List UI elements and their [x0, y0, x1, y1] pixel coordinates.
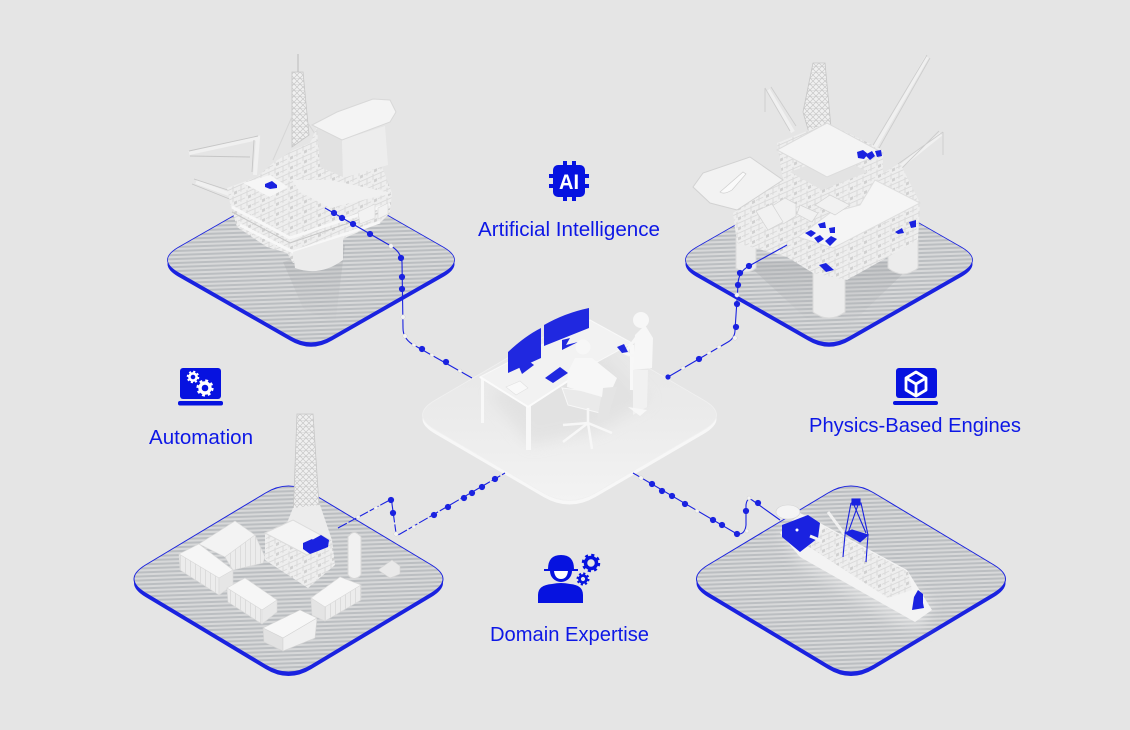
upper deck [777, 123, 883, 177]
floor shadow [490, 350, 650, 445]
icons: blue equipment [805, 150, 916, 272]
panel: top-left offshore platform [168, 54, 454, 347]
drill floor [265, 520, 330, 555]
panel: bottom-left drilling site [134, 414, 443, 676]
plate: top-right base [686, 177, 972, 347]
seated person and chair [562, 340, 617, 449]
upper block [317, 128, 343, 177]
deck surfaces [232, 175, 392, 252]
cranes [765, 55, 943, 168]
monitors [508, 308, 589, 374]
icon: blue equipment [265, 181, 277, 189]
books [506, 381, 528, 395]
icon: automation laptop with gears [178, 368, 223, 406]
icon: physics laptop with cube [893, 368, 938, 405]
helideck [693, 157, 783, 210]
connector: top-right platform to centre [665, 245, 787, 380]
tablet [617, 344, 628, 353]
platform silhouette [733, 123, 920, 280]
building: right block [311, 577, 361, 621]
building: large warehouse [179, 521, 265, 595]
heading: Automation: Automation [149, 427, 253, 449]
desk [480, 320, 634, 450]
tank [348, 532, 361, 578]
small unit [378, 560, 400, 578]
ship glow [780, 513, 930, 630]
platform slab [422, 330, 716, 504]
cargo boxes [756, 195, 850, 230]
icon: domain expert with gears [538, 555, 599, 603]
helideck [312, 99, 396, 140]
building: centre block [227, 578, 277, 624]
keyboard [545, 367, 568, 383]
plate: bottom-right base [696, 486, 1006, 676]
crane booms [189, 136, 258, 200]
blue module: stern [912, 590, 924, 610]
icon: AI chip [549, 161, 589, 201]
icon: AI chip: AI [559, 171, 579, 194]
derrick [273, 54, 322, 160]
panel: top-right offshore platform [686, 55, 972, 347]
plate: top-left base [168, 177, 454, 347]
plate: bottom-left base [134, 486, 443, 676]
heading: Physics-Based Engines: Physics-Based Engines [809, 415, 1021, 437]
blue module: bow [782, 515, 822, 552]
connector: bottom-left site to centre [338, 473, 505, 536]
heading: Artificial Intelligence: Artificial Intelligence [478, 219, 660, 241]
spar hull [293, 236, 343, 271]
crane arm [828, 512, 845, 535]
containers [263, 610, 317, 651]
derrick [293, 414, 320, 520]
platform body [227, 127, 392, 263]
panel: bottom-right drilling vessel [696, 486, 1006, 676]
blue derrick [843, 499, 868, 562]
main deck [798, 180, 920, 248]
icon: blue equipment [303, 535, 329, 554]
derrick [803, 63, 832, 150]
ship hull [780, 513, 932, 622]
heading: Domain Expertise: Domain Expertise [490, 624, 649, 646]
satellite dish [776, 505, 800, 519]
legs [736, 238, 918, 318]
connector: bottom-right vessel to centre [633, 473, 780, 537]
panel: central control room platform [422, 308, 716, 504]
derrick base [280, 505, 332, 540]
ship superstructure [806, 527, 912, 598]
substructure [265, 533, 335, 588]
helicopter [720, 172, 746, 193]
connector: top-left platform to centre [325, 208, 472, 378]
standing person [625, 312, 653, 416]
